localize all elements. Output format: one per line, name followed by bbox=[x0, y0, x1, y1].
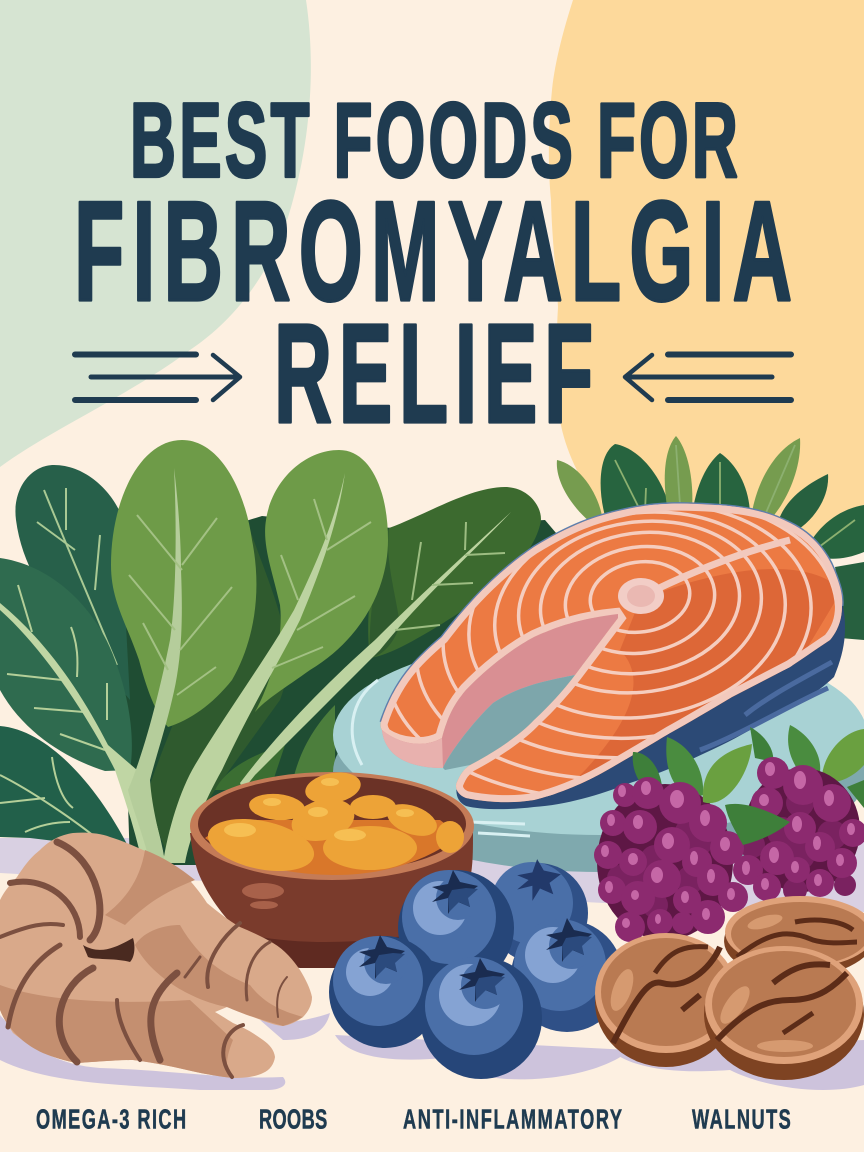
arrow: right bbox=[625, 354, 791, 400]
salmon belly pink bbox=[382, 614, 618, 768]
ginger root bbox=[0, 833, 312, 1078]
raspberry leaf: centre bbox=[703, 744, 790, 845]
turmeric highlights bbox=[224, 778, 414, 841]
ginger hole bbox=[83, 938, 134, 962]
title: FIBROMYALGIA bbox=[74, 172, 792, 331]
blueberry: left bbox=[329, 935, 441, 1048]
walnut: front right bbox=[704, 946, 864, 1080]
salmon steak bbox=[380, 502, 845, 810]
walnuts bbox=[595, 894, 864, 1080]
background blob: green bbox=[0, 0, 311, 467]
salmon skin bbox=[456, 600, 845, 809]
bowl highlights bbox=[242, 883, 284, 909]
label: walnuts: WALNUTS bbox=[692, 1105, 791, 1136]
ginger rings bbox=[0, 842, 287, 1077]
label: roobs: ROOBS bbox=[259, 1105, 327, 1136]
leaf: large left bbox=[0, 558, 132, 771]
plate bbox=[333, 635, 864, 872]
blueberry: front bbox=[420, 957, 542, 1079]
raspberry: left bbox=[594, 777, 748, 942]
leaf: right light bbox=[163, 450, 388, 863]
ginger body bbox=[0, 833, 312, 1078]
blueberries bbox=[329, 859, 623, 1079]
bowl of turmeric bbox=[190, 768, 474, 968]
title: BEST FOODS FOR bbox=[130, 81, 738, 200]
walnut: back right bbox=[722, 894, 864, 982]
blueberry: back left bbox=[398, 870, 514, 986]
salmon rings bbox=[380, 504, 842, 802]
salmon flesh bbox=[381, 504, 842, 802]
spinach leaves bbox=[0, 440, 562, 865]
blueberry: right bbox=[511, 918, 623, 1032]
bowl body bbox=[190, 833, 473, 967]
leaf stalks bbox=[0, 603, 165, 862]
blueberry: back right bbox=[488, 859, 588, 963]
leaf mass: dark background bbox=[120, 516, 562, 865]
leaf: centre light bbox=[111, 440, 256, 862]
title bbox=[74, 81, 792, 453]
label: anti-inflammatory: ANTI-INFLAMMATORY bbox=[403, 1105, 622, 1136]
ginger shading bbox=[0, 850, 303, 1078]
leaf: upper left dark bbox=[15, 465, 130, 700]
walnut: left bbox=[595, 933, 737, 1067]
bowl rim bbox=[190, 772, 474, 880]
bowl inside bbox=[198, 776, 466, 872]
salmon rim bbox=[382, 730, 443, 768]
turmeric chunks bbox=[203, 768, 464, 880]
salmon centre bbox=[618, 578, 664, 614]
salmon notch bbox=[443, 675, 575, 770]
leaf: lower left bbox=[0, 726, 130, 850]
background blob: yellow bbox=[549, 0, 864, 540]
label: omega-3 rich: OMEGA-3 RICH bbox=[36, 1105, 186, 1136]
back leaves behind salmon bbox=[557, 436, 864, 640]
raspberry leaves bbox=[633, 725, 864, 808]
arrow: left bbox=[75, 354, 240, 400]
floor shadows bbox=[0, 1013, 864, 1090]
salmon outline bbox=[381, 504, 842, 722]
raspberries bbox=[594, 725, 864, 942]
title: RELIEF bbox=[274, 295, 593, 453]
labels bbox=[36, 1105, 791, 1136]
raspberry: right bbox=[733, 757, 864, 902]
leaf: right large dark bbox=[240, 487, 541, 790]
